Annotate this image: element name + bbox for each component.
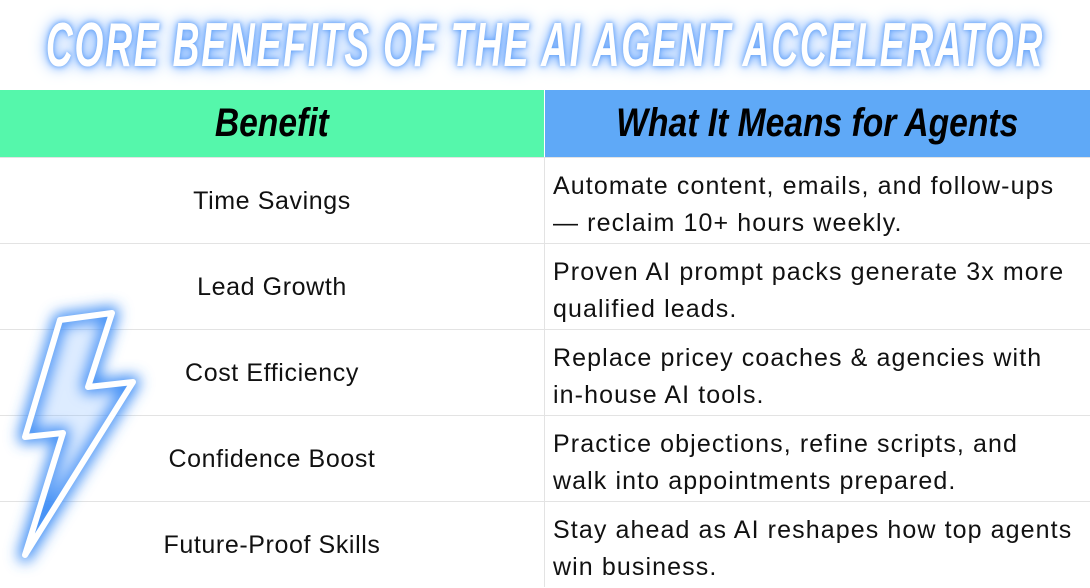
- header: benefit: Benefit: [215, 101, 329, 145]
- row: future-proof skills: Stay ahead as AI reshapes how top agents: [553, 516, 1072, 544]
- row: confidence boost: walk into appointments prepared.: [553, 467, 956, 495]
- header: meaning: What It Means for Agents: [617, 101, 1018, 145]
- row: cost efficiency: Cost Efficiency: [185, 359, 359, 387]
- row: lead growth: Lead Growth: [197, 273, 347, 301]
- row: cost efficiency: in-house AI tools.: [553, 381, 765, 409]
- row: lead growth: qualified leads.: [553, 295, 737, 323]
- row: cost efficiency: [0, 329, 1090, 416]
- header: meaning: [545, 90, 1090, 157]
- row: cost efficiency: Replace pricey coaches & agencies with: [553, 344, 1042, 372]
- row: lead growth: [0, 243, 1090, 330]
- row: confidence boost: Confidence Boost: [169, 445, 375, 473]
- row: time savings: Automate content, emails, and follow-ups: [553, 172, 1054, 200]
- header: benefit: [0, 90, 544, 157]
- row: future-proof skills: [0, 501, 1090, 588]
- row: confidence boost: Practice objections, refine scripts, and: [553, 430, 1018, 458]
- row: future-proof skills: Future-Proof Skills: [163, 531, 380, 559]
- row: lead growth: Proven AI prompt packs generate 3x more: [553, 258, 1064, 286]
- row: time savings: [0, 157, 1090, 244]
- row: time savings: — reclaim 10+ hours weekly.: [553, 209, 902, 237]
- row: time savings: Time Savings: [193, 187, 351, 215]
- row: future-proof skills: win business.: [553, 553, 717, 581]
- row: confidence boost: [0, 415, 1090, 502]
- title: CORE BENEFITS OF THE AI AGENT ACCELERATOR: [46, 11, 1044, 80]
- icon: neon lightning bolt: [8, 295, 150, 572]
